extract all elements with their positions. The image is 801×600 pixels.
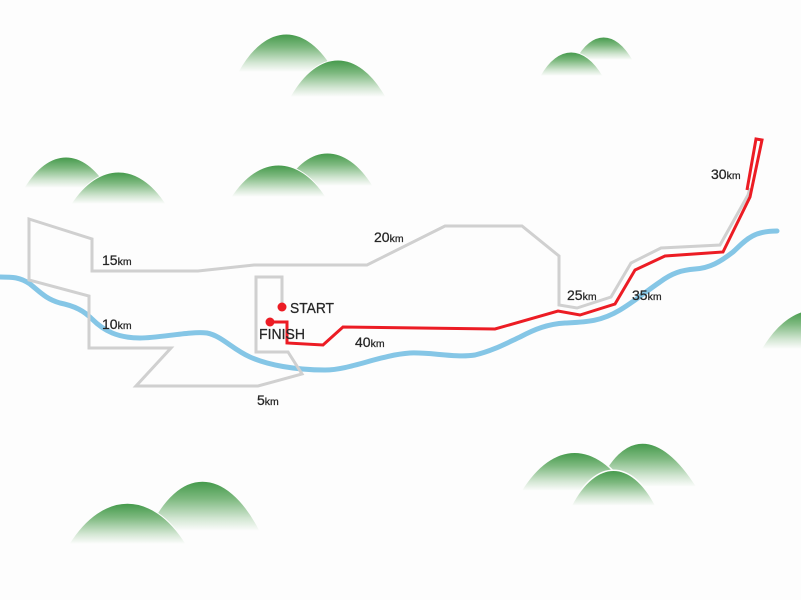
label: 40km: 40km: [355, 334, 385, 350]
hills: top right: [540, 37, 633, 76]
red course: finish section: [270, 139, 762, 345]
grey course outline: [29, 188, 750, 386]
hills: lower left: [69, 481, 260, 544]
hills: middle: [231, 153, 373, 197]
label: FINISH: FINISH: [259, 327, 305, 343]
label: 30km: 30km: [711, 166, 741, 182]
label: 15km: 15km: [102, 252, 132, 268]
label: 20km: 20km: [374, 229, 404, 245]
label: START: START: [290, 301, 334, 317]
hills: top centre: [238, 34, 386, 97]
hills: upper left: [24, 157, 166, 204]
hills: lower right: [521, 443, 697, 506]
label: 25km: 25km: [567, 287, 597, 303]
label: 5km: 5km: [257, 392, 279, 408]
label: 35km: 35km: [632, 287, 662, 303]
finish marker: [266, 318, 274, 326]
start marker: [278, 302, 286, 312]
hill: right edge: [762, 310, 801, 349]
label: 10km: 10km: [102, 316, 132, 332]
river: [0, 231, 777, 370]
